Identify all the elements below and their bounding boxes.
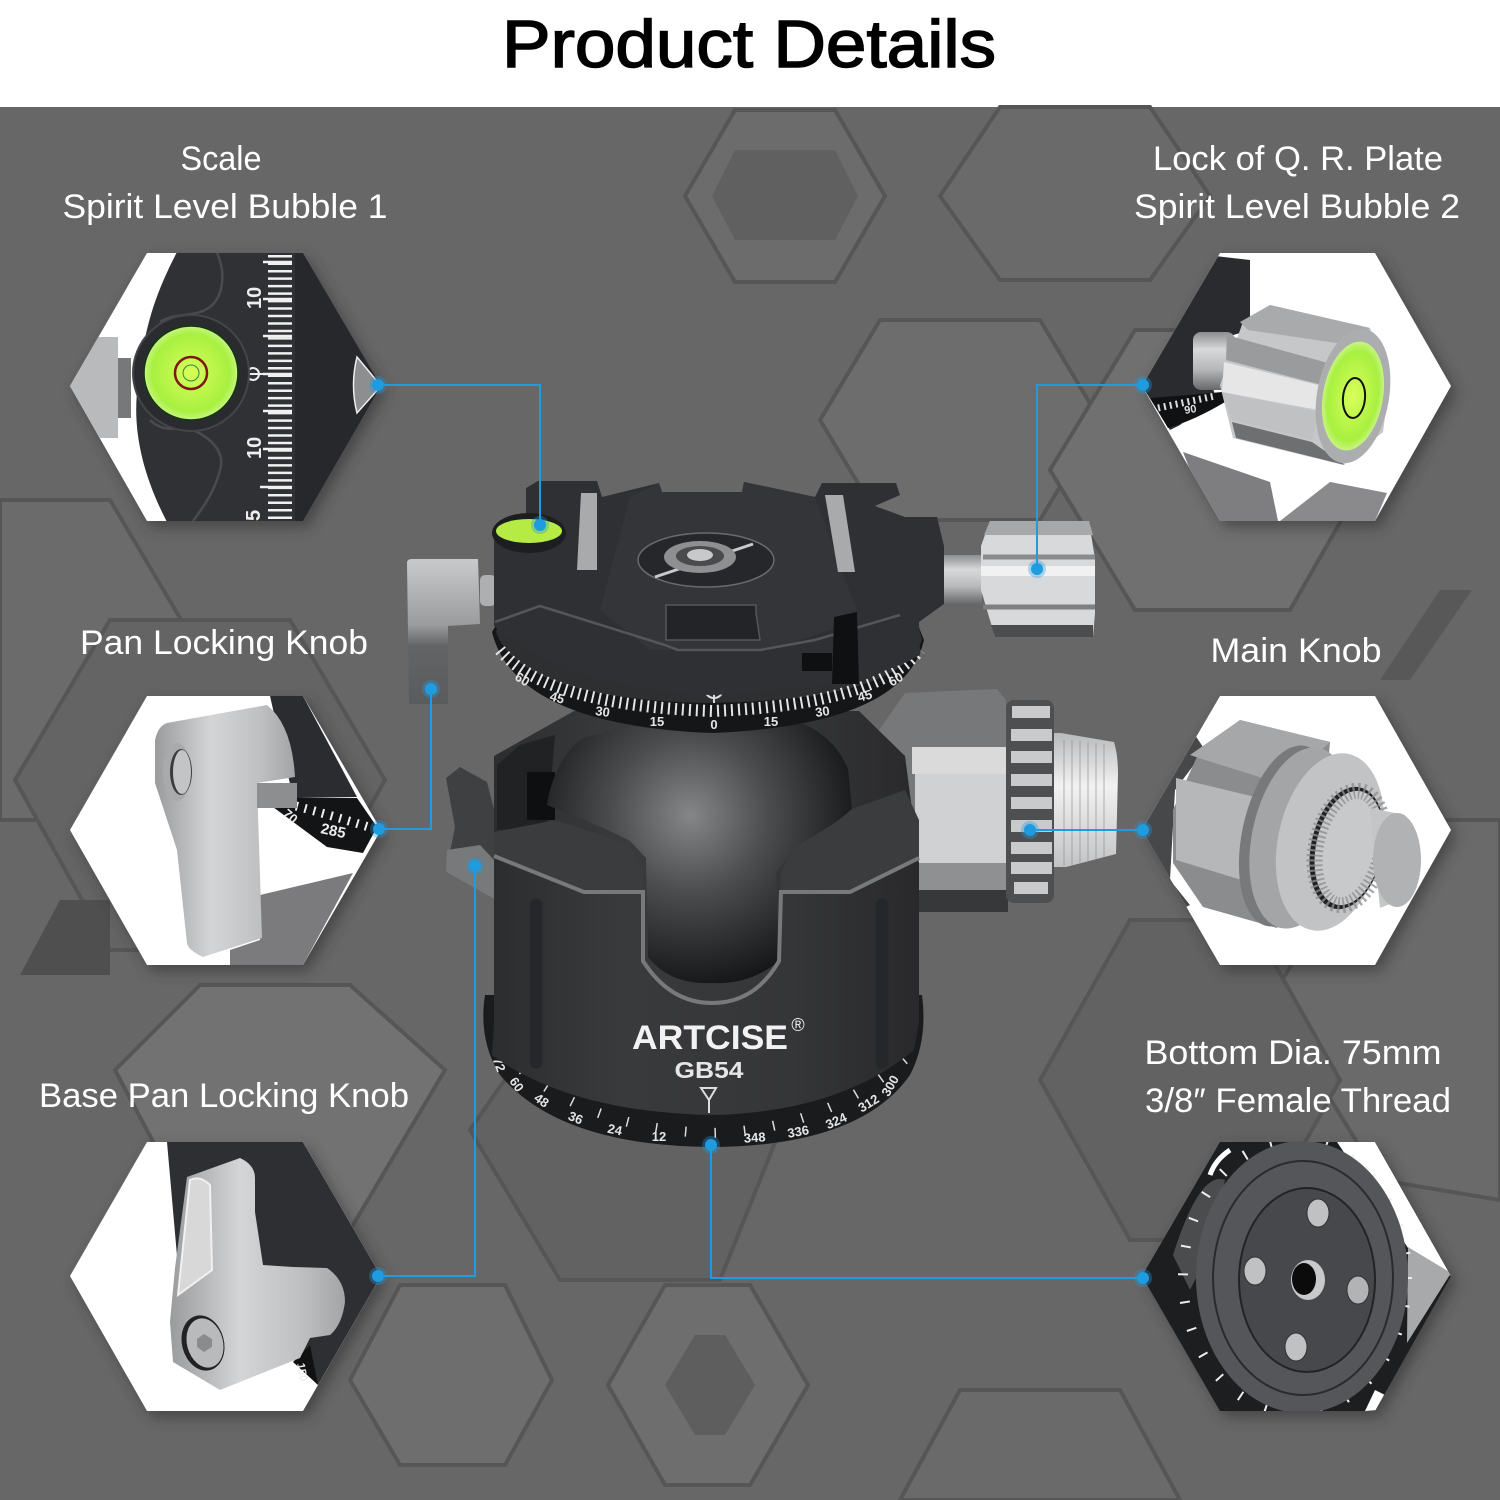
hexagon detail: pan locking knob: 70 — [280, 806, 301, 827]
label: base pan locking knob: Base Pan Locking Knob — [39, 1077, 409, 1115]
hexagon drop shadows — [75, 259, 1456, 1417]
title band: Product Details — [502, 7, 996, 82]
left shoulder — [494, 820, 643, 892]
rotation scale disk: 45 — [856, 687, 874, 705]
label: spirit level bubble 1: Spirit Level Bubble 1 — [62, 188, 388, 226]
base rotating ring: 348 — [743, 1129, 766, 1146]
right knob — [981, 521, 1095, 637]
hexagon detail: pan locking knob: 285 — [319, 820, 347, 842]
rotation scale disk: 30 — [594, 703, 611, 720]
base rotating ring: 60 — [506, 1074, 527, 1095]
hexagon detail: bottom of base with thread — [1136, 1141, 1451, 1413]
rotation scale disk: 30 — [814, 703, 831, 720]
bubble level on plate — [492, 513, 566, 553]
base rotating ring: 48 — [531, 1090, 552, 1111]
pointer triangle — [701, 1088, 716, 1113]
title band — [0, 0, 1500, 107]
hexagon detail: quick release lock knob: 90 — [1183, 403, 1198, 417]
base rotating ring: 324 — [823, 1109, 850, 1132]
rotation scale disk: 15 — [650, 714, 664, 729]
model name: GB54 — [674, 1057, 744, 1083]
center screw — [638, 533, 774, 587]
hexagon detail: scale and bubble: 10 — [244, 437, 266, 459]
base rotating ring: 36 — [566, 1108, 585, 1127]
callout connector: bottom — [702, 1136, 1152, 1287]
base rotating ring: 12 — [652, 1129, 666, 1144]
clamp slot on the right — [802, 612, 859, 684]
label: bottom diameter: Bottom Dia. 75mm — [1144, 1034, 1442, 1072]
base rotating ring: 336 — [786, 1122, 810, 1141]
hexagon detail: base pan locking knob — [70, 1142, 385, 1412]
registered mark: ® — [791, 1015, 805, 1035]
front slot — [666, 605, 760, 640]
lever lower grip — [446, 845, 494, 899]
right shaft — [940, 555, 982, 604]
hexagon detail: scale and bubble: 10 — [244, 287, 266, 309]
base rotating ring: 24 — [606, 1121, 624, 1139]
rotation scale disk: 60 — [512, 669, 532, 689]
label: lock of Q. R. plate: Lock of Q. R. Plate — [1153, 140, 1443, 178]
grooves on base — [536, 905, 882, 1062]
plate bevel lines — [495, 606, 900, 650]
clamp scale right — [825, 495, 855, 572]
product: ball head — [407, 481, 1118, 1147]
callout connector: lock knob — [1028, 376, 1152, 578]
pan lock lever — [407, 559, 480, 704]
rotation scale disk — [492, 600, 924, 733]
right shoulder — [781, 790, 919, 892]
lever screw — [480, 575, 496, 606]
clamp plate — [494, 481, 944, 695]
hexagon detail: base pan locking knob: 150 — [294, 1362, 309, 1382]
label: female thread: 3/8″ Female Thread — [1145, 1082, 1451, 1120]
label: pan locking knob: Pan Locking Knob — [80, 624, 368, 662]
base body — [492, 711, 919, 1115]
hexagon detail: main knob — [1136, 696, 1451, 966]
hexagon detail: scale and bubble — [70, 252, 385, 522]
base rotating ring: 72 — [490, 1055, 509, 1074]
main knob on body — [877, 689, 1118, 912]
plate centre raised area — [600, 482, 860, 650]
socket behind ball — [497, 735, 555, 830]
rotation scale disk: 45 — [548, 689, 566, 707]
base rotating ring — [483, 995, 924, 1147]
brand logo: ARTCISE — [632, 1019, 788, 1057]
base pan locking lever — [446, 767, 494, 899]
label: main knob: Main Knob — [1210, 632, 1382, 670]
callout connector: pan lock — [370, 680, 440, 838]
clamp scale left — [577, 493, 597, 570]
callout connector: scale — [369, 376, 549, 534]
hexagon detail: quick release lock knob — [1136, 252, 1451, 522]
label: scale: Scale — [180, 140, 262, 178]
ball and neck — [547, 724, 852, 983]
black recess — [527, 772, 555, 820]
base rotating ring: 312 — [855, 1091, 882, 1115]
rotation scale disk: 0 — [710, 717, 718, 732]
callout connector: base pan lock — [369, 857, 484, 1285]
rotation scale disk: 15 — [764, 714, 778, 729]
base rotating ring: 300 — [878, 1073, 902, 1099]
rotation scale disk: 60 — [886, 669, 906, 689]
hexagon detail: pan locking knob — [70, 696, 385, 966]
callout connector: main knob — [1021, 821, 1152, 839]
hexagon detail: scale and bubble: 5 — [243, 510, 265, 521]
label: spirit level bubble 2: Spirit Level Bubble 2 — [1134, 188, 1460, 226]
cup bevel — [494, 856, 919, 1003]
